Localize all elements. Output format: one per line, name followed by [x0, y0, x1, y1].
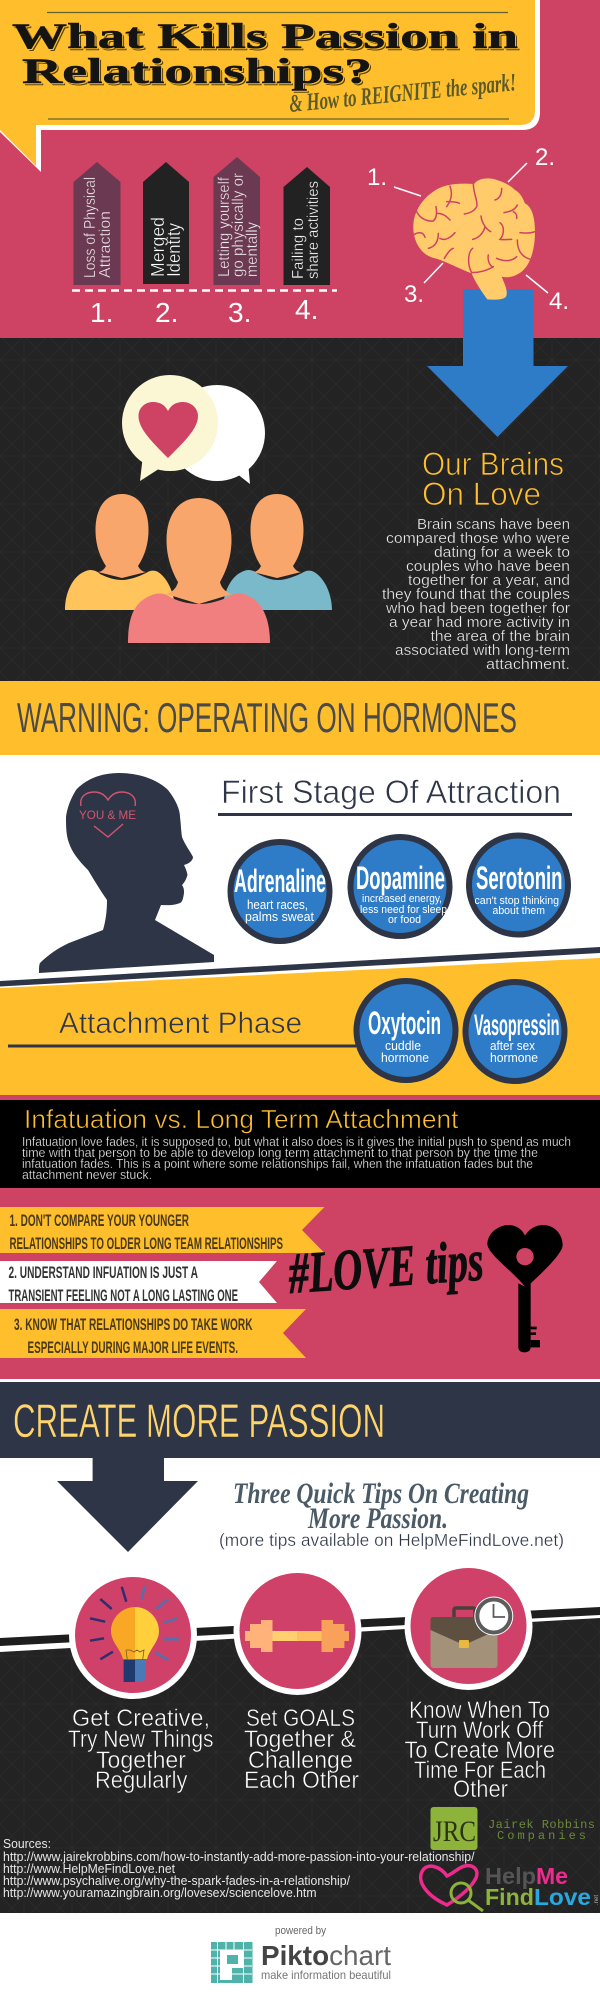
arrow 2 [143, 162, 189, 284]
arrow numbers: 4. [295, 294, 318, 325]
panel: warning band [0, 681, 600, 755]
panel: brains on love dark background [0, 338, 600, 682]
icon: heart [138, 402, 198, 458]
arrow 1 [74, 162, 120, 285]
icon: navy down arrow [57, 1458, 198, 1552]
logo: JRC: Companies [497, 1829, 586, 1843]
title: Relationships? [24, 53, 374, 93]
circle: adrenaline: heart races, [247, 897, 308, 912]
text: set goals: Challenge [248, 1747, 353, 1774]
text: brain scans paragraph: together for a year, and [408, 573, 570, 589]
heading: three quick tips [233, 1477, 529, 1535]
arrow 2: Merged [148, 217, 168, 277]
text: get creative [68, 1705, 214, 1794]
text: know when: Other [453, 1776, 508, 1803]
icon: briefcase with clock [404, 1562, 532, 1690]
ribbon tip 3: ESPECIALLY DURING MAJOR LIFE EVENTS. [28, 1338, 238, 1357]
ribbon tip 2 [0, 1261, 277, 1305]
tip: get creative [68, 1571, 214, 1794]
heading: attachment phase: Attachment Phase [59, 1007, 302, 1040]
circle: oxytocin: hormone [381, 1050, 429, 1065]
logo: HelpMeFindLove: Find [485, 1884, 534, 1910]
text: infatuation paragraph: time with that person to be able to develop long term attachment to that person by the time the [22, 1146, 538, 1160]
title: Relationships? [23, 52, 373, 92]
text: set goals: Each Other [244, 1767, 359, 1794]
circle: dopamine: or food [388, 914, 421, 926]
logo: HelpMeFindLove [421, 1863, 600, 1911]
text: know when: Turn Work Off [416, 1717, 543, 1744]
icon: dumbbell [234, 1567, 362, 1695]
icon: brain with numbered labels: 4. [549, 288, 569, 315]
icon: heart key [487, 1225, 563, 1352]
icon: brain with numbered labels: 1. [367, 164, 387, 191]
text: brain scans paragraph: Brain scans have been [417, 517, 570, 533]
circle: dopamine: Dopamine [356, 860, 445, 896]
heading: three quick tips: Three Quick Tips On Creating [233, 1477, 529, 1510]
text: brain scans paragraph: attachment. [486, 657, 570, 673]
ribbon tip 3 [0, 1309, 306, 1358]
circle: vasopressin: hormone [490, 1050, 538, 1065]
arrow 3: mentally [244, 222, 261, 277]
ribbon tip 1 [0, 1207, 324, 1253]
title: What Kills Passion in [13, 17, 519, 57]
logo: HelpMeFindLove: .net [594, 1895, 600, 1905]
text: brain scans paragraph: dating for a week to [434, 545, 570, 561]
panel: pink strip and tips background [0, 1095, 600, 1380]
arrow 3: go physically or [230, 172, 247, 277]
text: infatuation paragraph: Infatuation love fades, it is supposed to, but what it also does is it gives the initial push to spend as much [22, 1135, 571, 1149]
arrow 4: Failing to [290, 218, 307, 279]
ribbon tip 3: 3. KNOW THAT RELATIONSHIPS DO TAKE WORK [14, 1315, 253, 1334]
text: infatuation paragraph: attachment never stuck. [22, 1168, 152, 1182]
tip: know when to turn work off [404, 1562, 555, 1803]
text: brain scans paragraph: who had been together for [385, 601, 570, 617]
logo: JRC: JRC [433, 1815, 476, 1848]
circle: adrenaline: palms sweat [245, 909, 314, 924]
logo: HelpMeFindLove: Help [485, 1863, 536, 1889]
heading: our brains on love: Our Brains [422, 446, 564, 482]
icon: you and me heart [79, 792, 136, 837]
arrow 4: share activities [305, 181, 322, 279]
circle: oxytocin [356, 981, 456, 1080]
divider strip [0, 1607, 600, 1646]
text: more tips note: (more tips available on HelpMeFindLove.net) [219, 1530, 564, 1550]
arrow 3: Letting yourself [216, 176, 233, 277]
logo: HelpMeFindLove: Me [536, 1863, 568, 1889]
circle: adrenaline [230, 842, 330, 941]
text: get creative: Regularly [95, 1767, 188, 1794]
footer: piktochart branding: powered by [275, 1925, 326, 1937]
panel: intro pink background [0, 0, 600, 339]
text: set goals: Together & [244, 1726, 356, 1753]
icon: brain with numbered labels: 3. [404, 281, 424, 308]
circle: serotonin: about them [492, 905, 545, 917]
icon: brain with numbered labels [367, 144, 569, 315]
text: brain scans paragraph: couples who have been [406, 559, 570, 575]
text: brain scans paragraph [382, 517, 570, 673]
text: sources: http://www.jairekrobbins.com/how-to-instantly-add-more-passion-into-your-relationship/ [3, 1849, 475, 1864]
text: know when: Know When To [409, 1697, 550, 1724]
arrow numbers: 1. [90, 297, 113, 328]
arrow 4 [284, 167, 330, 285]
arrow numbers: 2. [155, 297, 178, 328]
ribbon tip 2: TRANSIENT FEELING NOT A LONG LASTING ONE [8, 1286, 238, 1305]
text: sources: Sources: [3, 1836, 51, 1851]
title: What Kills Passion in [14, 18, 520, 58]
arrow 3 [214, 157, 261, 285]
circle: dopamine: less need for sleep [360, 904, 447, 916]
icon: head silhouette [39, 773, 214, 973]
text: know when: To Create More [404, 1737, 555, 1764]
white divider [0, 1379, 600, 1382]
ribbon tip 1: 1. DON'T COMPARE YOUR YOUNGER [10, 1211, 189, 1230]
text: sources: http://www.HelpMeFindLove.net [3, 1861, 175, 1876]
text: infatuation paragraph: infatuation fades. This is a point where some relationships fail, when the infatuation fades but the [22, 1157, 533, 1171]
text: get creative: Together [96, 1747, 186, 1774]
text: sources [3, 1836, 475, 1900]
text: brain scans paragraph: the area of the brain [430, 629, 570, 645]
text: get creative: Try New Things [68, 1726, 214, 1753]
footer: piktochart branding: make information beautiful [261, 1968, 391, 1982]
arrow 2: Identity [164, 223, 184, 277]
heading: our brains on love [422, 446, 564, 512]
icon: speech bubbles with heart [122, 375, 265, 484]
panel: dark footer background [0, 1618, 600, 1913]
icon: you and me heart: YOU & ME [79, 810, 136, 822]
ribbon tip 1: RELATIONSHIPS TO OLDER LONG TEAM RELATIONSHIPS [10, 1234, 283, 1253]
text: get creative: Get Creative, [72, 1705, 210, 1732]
panel: create more passion header [0, 1382, 600, 1458]
icon: brain with numbered labels: 2. [535, 144, 555, 171]
text: brain scans paragraph: associated with long-term [395, 643, 570, 659]
circle: vasopressin: after sex [490, 1038, 535, 1053]
circle: vasopressin [466, 982, 564, 1081]
panel: first stage of attraction [0, 755, 600, 987]
heading: infatuation: Infatuation vs. Long Term Attachment [24, 1104, 459, 1134]
text: set goals [244, 1705, 359, 1794]
heading: first stage: First Stage Of Attraction [221, 774, 561, 810]
footer: piktochart branding [211, 1925, 391, 1983]
circle: dopamine: increased energy, [362, 893, 442, 905]
icon: blue down arrow [427, 289, 568, 437]
icon: three people [65, 494, 332, 643]
panel: infatuation vs long term attachment [0, 1100, 600, 1188]
heading: our brains on love: On Love [422, 476, 541, 512]
speech bubble header [0, 0, 540, 172]
circle: oxytocin: Oxytocin [368, 1005, 441, 1041]
circle: serotonin: can't stop thinking [474, 895, 559, 907]
text: brain scans paragraph: a year had more activity in [389, 615, 570, 631]
ribbon tip 2: 2. UNDERSTAND INFUATION IS JUST A [8, 1263, 198, 1282]
panel: attachment phase [0, 947, 600, 1096]
title: Relationships? [22, 51, 372, 91]
logo: piktochart mark [211, 1942, 252, 1983]
text: brain scans paragraph: they found that the couples [382, 587, 570, 603]
icon: lightbulb [69, 1571, 197, 1699]
arrow 1: Attraction [97, 211, 114, 278]
logo: JRC: Jairek Robbins [488, 1818, 595, 1832]
circle: dopamine [350, 837, 450, 936]
text: know when: Time For Each [414, 1757, 546, 1784]
logo: HelpMeFindLove: Love [534, 1884, 591, 1910]
text: brain scans paragraph: compared those who were [386, 531, 570, 547]
heading: create more passion: CREATE MORE PASSION [13, 1394, 385, 1447]
circle: serotonin [469, 836, 568, 934]
chart: four arrows of passion killers [72, 157, 337, 328]
arrow numbers [90, 294, 318, 328]
text: sources: http://www.youramazingbrain.org/lovesex/sciencelove.htm [3, 1885, 316, 1900]
title [12, 16, 520, 93]
text: set goals: Set GOALS [246, 1705, 355, 1732]
panel: tips white background [0, 1458, 600, 1658]
circle: oxytocin: cuddle [385, 1038, 421, 1053]
heading: love tips: #LOVE tips [286, 1228, 485, 1306]
text: sources: http://www.psychalive.org/why-the-spark-fades-in-a-relationship/ [3, 1873, 350, 1888]
title: What Kills Passion in [12, 16, 518, 56]
heading: three quick tips: More Passion. [307, 1502, 448, 1535]
arrow numbers: 3. [228, 297, 251, 328]
circle: adrenaline: Adrenaline [234, 863, 326, 899]
footer: piktochart branding: Piktochart [261, 1940, 391, 1971]
arrow 1: Loss of Physical [82, 177, 99, 278]
text: infatuation paragraph [22, 1135, 571, 1182]
logo: JRC [430, 1807, 595, 1850]
text: know when [404, 1697, 555, 1803]
tip: set goals [234, 1567, 362, 1794]
